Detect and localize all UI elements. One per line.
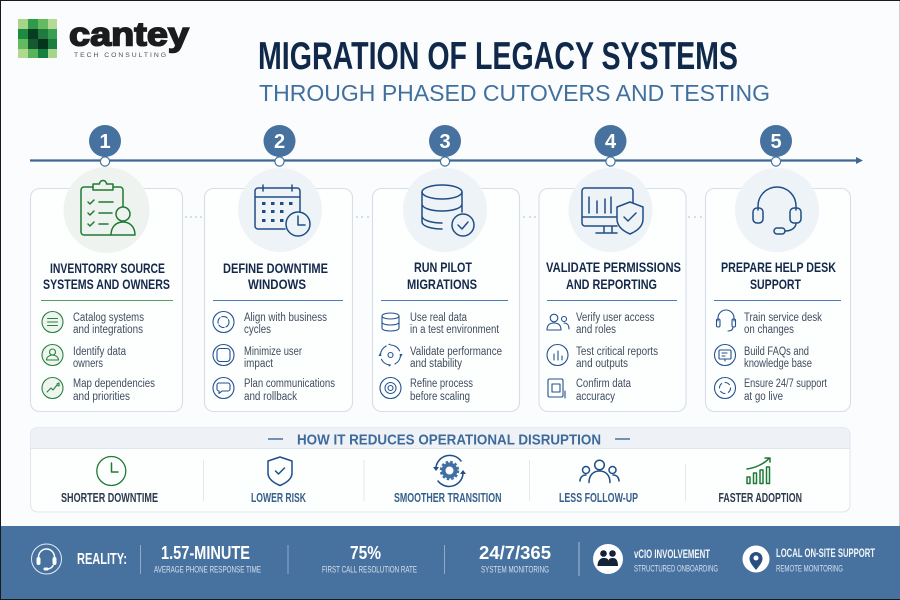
stat: system monitoring: 24/7/365 xyxy=(479,543,551,563)
panel: card 4 xyxy=(539,188,686,412)
list: step 5: Build FAQs and xyxy=(744,346,809,358)
benefit: shorter downtime: SHORTER DOWNTIME xyxy=(61,491,158,505)
heading: step 2: DEFINE DOWNTIME xyxy=(223,260,328,276)
footer: vCIO item: vCIO INVOLVEMENT xyxy=(634,549,710,561)
footer band xyxy=(0,526,900,600)
list: step 4: and outputs xyxy=(576,358,628,370)
step badge 1 xyxy=(89,125,121,166)
step badge 4 xyxy=(594,125,626,166)
benefit: lower risk xyxy=(251,457,306,505)
step badge 2 xyxy=(264,125,296,166)
step badge 2: 2 xyxy=(274,131,285,153)
list: step 4: Test critical reports xyxy=(576,346,658,358)
panel: card 5 xyxy=(706,188,850,412)
step badge 4: 4 xyxy=(605,131,617,153)
list: step 1: owners xyxy=(73,358,103,370)
footer: headset icon xyxy=(32,544,62,574)
heading: step 4 xyxy=(546,259,681,292)
list: step 4: Verify user access xyxy=(576,312,655,324)
benefit: lower risk: LOWER RISK xyxy=(251,491,306,505)
heading: step 3: MIGRATIONS xyxy=(407,276,477,292)
heading: step 1: INVENTORRY SOURCE xyxy=(50,260,165,276)
icon: calendar with clock xyxy=(238,168,322,252)
list: step 3: and stability xyxy=(410,358,462,370)
list: step 3: Validate performance xyxy=(410,346,502,358)
heading: step 2 xyxy=(223,260,328,292)
step badge 3: 3 xyxy=(439,131,451,153)
list: step 5: on changes xyxy=(744,324,794,336)
list: step 4 xyxy=(547,312,658,403)
heading: step 1: SYSTEMS AND OWNERS xyxy=(43,276,170,292)
heading: step 2: WINDOWS xyxy=(248,276,306,292)
footer: vCIO item: STRUCTURED ONBOARDING xyxy=(634,564,718,574)
heading: step 5: SUPPORT xyxy=(750,276,801,292)
heading: step 1 xyxy=(43,260,170,292)
panel: card 1 xyxy=(30,188,182,412)
list: step 5: at go live xyxy=(744,391,783,403)
step badge 5: 5 xyxy=(770,131,782,153)
footer: local support item: REMOTE MONITORING xyxy=(776,564,843,574)
panel: card 2 xyxy=(204,188,352,412)
list: step 5 xyxy=(714,310,828,403)
panel: how it reduces operational disruption xyxy=(30,428,850,512)
list: step 1 xyxy=(42,312,155,403)
list: step 2: cycles xyxy=(244,324,271,336)
stat: first call resolution xyxy=(322,543,417,574)
list: step 5: knowledge base xyxy=(744,358,812,370)
stat: first call resolution: 75% xyxy=(350,543,381,563)
logo: TECH CONSULTING xyxy=(74,52,166,59)
list: step 2 xyxy=(213,312,335,403)
icon: database with check xyxy=(403,168,487,252)
icon: headset xyxy=(735,168,819,252)
list: step 1: Map dependencies xyxy=(73,378,155,390)
list: step 1: and priorities xyxy=(73,391,130,403)
heading: step 4: AND REPORTING xyxy=(566,276,657,292)
list: step 3: Refine process xyxy=(410,378,473,390)
stat: system monitoring xyxy=(479,543,551,574)
footer: local support item xyxy=(742,546,875,574)
column dividers xyxy=(204,460,686,501)
list: step 3: before scaling xyxy=(410,391,470,403)
heading: step 3 xyxy=(407,259,477,292)
heading: step 3: RUN PILOT xyxy=(414,259,472,275)
list: step 5: Ensure 24/7 support xyxy=(744,378,828,390)
stat: phone response xyxy=(154,543,261,574)
icon: monitor with shield xyxy=(568,168,652,252)
footer: vCIO item xyxy=(593,544,718,574)
footer dividers xyxy=(140,545,444,574)
benefit: smoother transition xyxy=(394,455,502,505)
list: step 3: Use real data xyxy=(410,312,467,324)
timeline arrow xyxy=(30,157,863,164)
list: step 3 xyxy=(378,312,502,403)
list: step 2: Minimize user xyxy=(244,346,302,358)
benefit: faster adoption: FASTER ADOPTION xyxy=(718,491,802,505)
logo xyxy=(18,16,190,59)
footer: reality label: REALITY: xyxy=(77,551,127,568)
panel: card 3 xyxy=(372,188,520,412)
icon: clipboard with person xyxy=(64,167,150,253)
heading: step 5 xyxy=(721,259,836,292)
benefit: less follow-up: LESS FOLLOW-UP xyxy=(559,491,638,505)
benefit: smoother transition: SMOOTHER TRANSITION xyxy=(394,491,502,505)
list: step 1: Catalog systems xyxy=(73,312,144,324)
list: step 2: and rollback xyxy=(244,391,297,403)
list: step 1: Identify data xyxy=(73,346,127,358)
subtitle: THROUGH PHASED CUTOVERS AND TESTING xyxy=(259,80,770,106)
heading: step 5: PREPARE HELP DESK xyxy=(721,259,836,275)
logo: cantey xyxy=(69,16,190,52)
list: step 2: Plan communications xyxy=(244,378,335,390)
stat: first call resolution: FIRST CALL RESOLUTION RATE xyxy=(322,564,417,574)
list: step 4: accuracy xyxy=(576,391,615,403)
list: step 4: Confirm data xyxy=(576,378,631,390)
step badge 1: 1 xyxy=(99,131,111,153)
dotted connectors xyxy=(185,216,702,218)
panel heading: HOW IT REDUCES OPERATIONAL DISRUPTION xyxy=(297,432,601,448)
stat: system monitoring: SYSTEM MONITORING xyxy=(481,564,549,574)
stat: phone response: 1.57-MINUTE xyxy=(161,543,250,563)
list: step 1: and integrations xyxy=(73,324,143,336)
title: MIGRATION OF LEGACY SYSTEMS xyxy=(258,35,738,78)
benefit: shorter downtime xyxy=(61,456,158,505)
list: step 2: Align with business xyxy=(244,312,327,324)
list: step 2: impact xyxy=(244,358,274,370)
benefit: less follow-up xyxy=(559,460,638,505)
list: step 3: in a test environment xyxy=(410,324,500,336)
stat: phone response: AVERAGE PHONE RESPONSE TIME xyxy=(154,564,261,574)
step badge 3 xyxy=(429,125,461,166)
step badge 5 xyxy=(760,125,792,166)
list: step 4: and roles xyxy=(576,324,616,336)
benefit: faster adoption xyxy=(718,458,802,505)
heading: step 4: VALIDATE PERMISSIONS xyxy=(546,259,681,275)
list: step 5: Train service desk xyxy=(744,312,822,324)
